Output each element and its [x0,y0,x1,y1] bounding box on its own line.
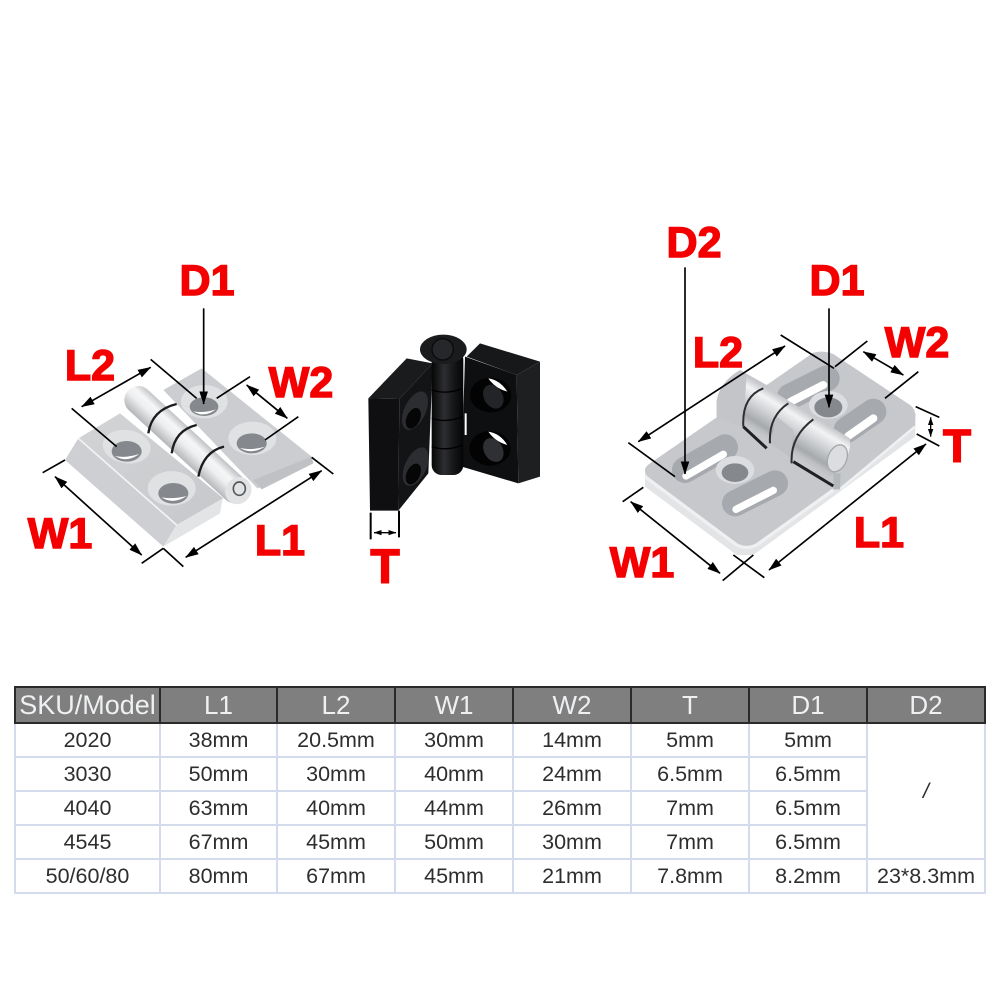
label: L1: L1 [854,509,904,557]
label: L2: L2 [693,329,743,377]
specification table: 44mm [424,796,484,820]
product illustrations with dimension callouts [26,219,972,594]
specification table: 40mm [424,762,484,786]
specification table: 23*8.3mm [877,864,975,888]
label: W1: W1 [610,539,674,587]
black hinge body [368,335,540,511]
specification table: 6.5mm [775,830,841,854]
specification table: 6.5mm [775,762,841,786]
label: D2: D2 [667,219,721,267]
specification table: 7.8mm [657,864,723,888]
specification table: 63mm [189,796,248,820]
right hinge with dimensions [610,219,971,587]
specification table: 4040 [64,796,111,820]
specification table: 45mm [306,830,366,854]
label: W2: W2 [269,359,333,407]
specification table: 2020 [64,728,111,752]
specification table [14,686,986,894]
left hinge dimension arrows [43,308,333,567]
specification table: 5mm [666,728,714,752]
barrel [833,473,841,489]
specification table: SKU/Model [19,690,156,720]
specification table: 67mm [306,864,366,888]
thickness dimension [371,511,399,539]
specification table: 50mm [424,830,484,854]
specification table: 30mm [306,762,366,786]
specification table: L2 [322,690,350,720]
label: T: T [943,420,971,472]
specification table: W1 [434,690,474,720]
label: W2: W2 [885,319,949,367]
label: D1: D1 [810,257,864,305]
specification table: 26mm [542,796,602,820]
specification table: / [923,778,929,802]
specification table: D2 [909,690,943,720]
specification table: 20.5mm [297,728,375,752]
right hinge body [645,352,916,555]
specification table: T [682,690,698,720]
specification table: 50/60/80 [46,864,129,888]
specification table: 7mm [666,830,714,854]
label: L2: L2 [65,342,115,390]
specification table: 5mm [784,728,832,752]
specification table: L1 [204,690,233,720]
label: W1: W1 [28,510,92,558]
left hinge body [65,368,313,547]
specification table: 7mm [666,796,714,820]
middle black hinge [368,335,540,594]
specification table: D1 [791,690,825,720]
specification table: 24mm [542,762,602,786]
specification table: 4545 [64,830,111,854]
specification table: 40mm [306,796,366,820]
label: D1: D1 [180,257,234,305]
specification table: 50mm [189,762,248,786]
label: L1: L1 [255,517,305,565]
specification table: 6.5mm [775,796,841,820]
specification table: 3030 [64,762,111,786]
specification table: 38mm [189,728,248,752]
specification table: 67mm [189,830,248,854]
label: T: T [370,541,400,594]
specification table: 21mm [542,864,602,888]
specification table: 6.5mm [657,762,723,786]
specification table: 14mm [542,728,602,752]
left hinge with dimensions [28,257,333,567]
specification table: 45mm [424,864,484,888]
specification table: 30mm [542,830,602,854]
right hinge dimension arrows [623,267,939,581]
specification table: W2 [552,690,592,720]
slots [790,378,827,397]
specification table: 80mm [189,864,248,888]
specification table: 30mm [424,728,484,752]
specification table: 8.2mm [775,864,841,888]
